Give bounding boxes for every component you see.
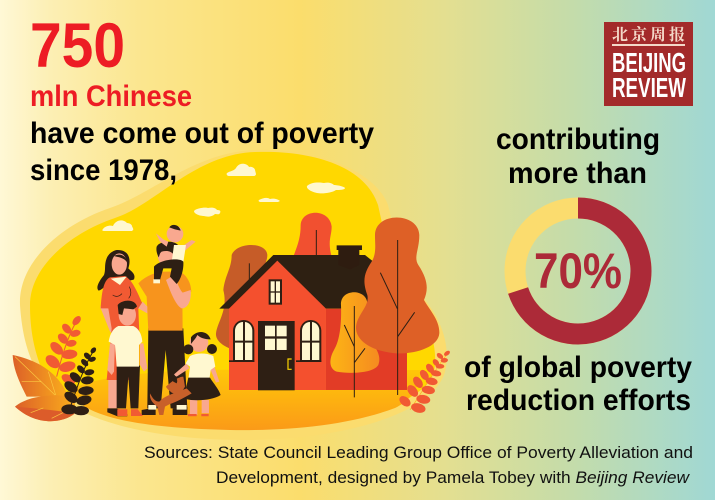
door [258,321,295,390]
text: of global poverty reduction efforts [464,351,692,417]
donut chart: 70% [515,208,641,334]
dog [150,373,192,415]
right window [296,320,321,362]
headline: 750 mln Chinese [30,11,192,113]
house front wall [229,261,326,390]
background blob [20,150,447,440]
back left tree [216,245,267,353]
sources credit [144,443,693,487]
tall front tree [356,217,439,395]
icon: autumn leaves and ferns at left [13,314,97,421]
Beijing Review logo [604,22,693,106]
Beijing Review logo: 北京周报 [612,22,685,45]
clouds [102,164,345,231]
ground [70,370,420,430]
attic window [269,279,282,305]
dark fern [61,346,97,415]
text: of global poverty reduction efforts: of global poverty [464,351,692,384]
house scene [216,213,451,414]
headline: 750 mln Chinese: 750 [30,11,125,81]
text: contributing more than [496,123,660,190]
family illustration [97,225,221,416]
headline: 750 mln Chinese: mln Chinese [30,80,192,113]
headline: have come out of poverty: have come out of poverty [30,117,374,150]
red fern [43,314,83,387]
right fern [397,350,451,414]
text: contributing more than: contributing [496,123,660,156]
headline: have come out of poverty: since 1978, [30,154,177,187]
back red tree [293,213,332,257]
orange front tree [330,292,379,397]
father [138,242,191,415]
donut chart: 70%: 70% [534,243,622,299]
roof [219,255,373,309]
baby [153,225,196,284]
house side wall [326,309,407,390]
text: contributing more than: more than [508,157,647,190]
mother [97,250,147,416]
sources credit: Sources: State Council Leading Group Office of Poverty Alleviation and [144,443,693,462]
girl [173,332,221,416]
boy [107,301,147,416]
big leaves [13,355,68,397]
headline: have come out of poverty [30,117,374,187]
left window [229,320,254,362]
sources credit: Development, designed by Pamela Tobey with Beijing Review [216,468,691,487]
chimney [337,245,362,269]
text: of global poverty reduction efforts: reduction efforts [466,384,691,417]
